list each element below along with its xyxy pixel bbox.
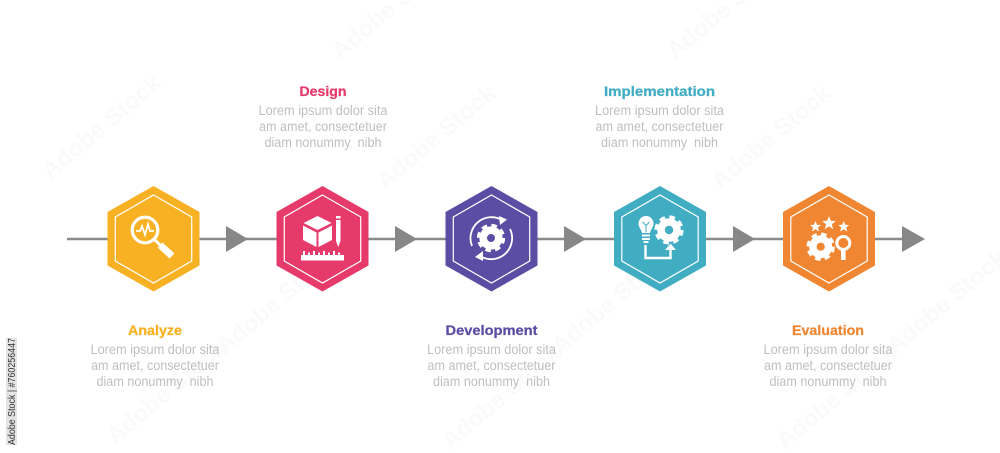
arrows [226, 226, 925, 252]
icon: magnifier with pulse [132, 217, 172, 256]
label: Evaluation: diam nonummy nibh [770, 374, 886, 389]
label: Evaluation: am amet, consectetuer [764, 358, 892, 373]
label: Implementation: diam nonummy nibh [601, 135, 718, 150]
label: Design [258, 84, 388, 150]
label: Development: Lorem ipsum dolor sita [427, 342, 556, 357]
step 1: Analyze hexagon [108, 186, 200, 292]
label: Design: Design [300, 84, 346, 99]
label: Implementation: am amet, consectetuer [596, 119, 724, 134]
label: Analyze: Analyze [128, 323, 183, 338]
text: Adobe Stock [707, 79, 837, 195]
label: Implementation [595, 84, 724, 150]
text: Adobe Stock [372, 79, 502, 195]
label: Design: am amet, consectetuer [259, 119, 387, 134]
text: Adobe Stock [212, 244, 342, 360]
label: Analyze: am amet, consectetuer [91, 358, 219, 373]
label: Evaluation [764, 323, 893, 389]
text: Adobe Stock [37, 69, 167, 185]
timeline line [67, 238, 905, 240]
label: Development: diam nonummy nibh [433, 374, 550, 389]
label: Analyze: diam nonummy nibh [96, 374, 214, 389]
step 5: Evaluation hexagon [783, 186, 875, 292]
label: Implementation: Implementation [604, 84, 715, 99]
label: Evaluation: Lorem ipsum dolor sita [764, 342, 893, 357]
icon: light bulb, gear and arrow [638, 216, 682, 258]
stock id side label: Adobe Stock | #760256447 [6, 338, 18, 445]
text: Adobe Stock [437, 339, 567, 453]
label: Implementation: Lorem ipsum dolor sita [595, 103, 724, 118]
label: Development [427, 323, 556, 389]
label: Development: am amet, consectetuer [428, 358, 556, 373]
icon: cube, pencil and ruler [301, 216, 344, 260]
text: Adobe Stock [547, 244, 677, 360]
step 4: Implementation hexagon [614, 186, 706, 292]
text: Adobe Stock [772, 339, 902, 453]
label: Design: diam nonummy nibh [264, 135, 382, 150]
text: Adobe Stock [102, 334, 232, 450]
label: Design: Lorem ipsum dolor sita [258, 103, 388, 118]
icon: stars, gear and magnifier [808, 216, 850, 260]
label: Analyze: Lorem ipsum dolor sita [90, 342, 220, 357]
icon: gear in rotating arrows [470, 216, 512, 261]
step 2: Design hexagon [276, 186, 368, 292]
step 3: Development hexagon [446, 186, 538, 292]
label: Evaluation: Evaluation [792, 323, 864, 338]
label: Analyze [90, 323, 220, 389]
label: Development: Development [446, 323, 538, 338]
